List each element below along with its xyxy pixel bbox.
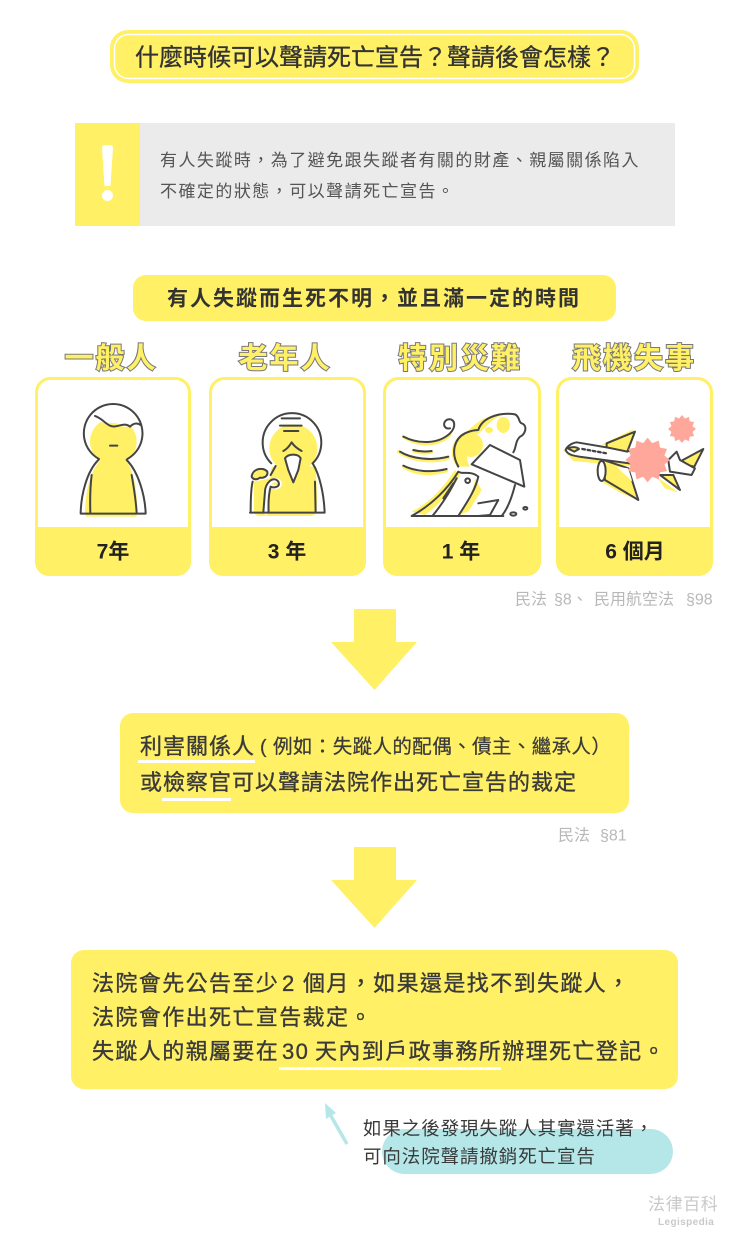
panel: special disaster [383, 342, 541, 576]
procedure text: 法院會先公告至少 [92, 971, 279, 996]
heading: condition [133, 275, 616, 321]
intro text: 有人失蹤時，為了避免跟失蹤者有關的財產、親屬關係陷入 [160, 150, 640, 170]
card frame [35, 378, 191, 576]
heading: 老年人 [238, 342, 332, 375]
underline: interested parties [138, 760, 255, 763]
procedure text: 法院會作出死亡宣告裁定。 [92, 1005, 373, 1030]
arrow: back to court [325, 1103, 347, 1144]
panel: elderly person [209, 342, 366, 576]
arrow: down 1 [331, 609, 417, 690]
heading: 一般人 [64, 342, 158, 375]
logo: Legispedia [648, 1195, 718, 1228]
icon: person [81, 404, 146, 517]
callout: revoke declaration [363, 1118, 673, 1174]
court order text: 或檢察官可以聲請法院作出死亡宣告的裁定 [140, 770, 577, 795]
title [110, 30, 639, 83]
panel: ordinary person [35, 342, 191, 576]
citation: civil code 81: 民法 [558, 826, 590, 844]
duration: 3 年 [268, 540, 306, 564]
heading: condition: 有人失蹤而生死不明，並且滿一定的時間 [167, 286, 581, 310]
title: 什麼時候可以聲請死亡宣告？聲請後會怎樣？ [135, 44, 615, 72]
underline: prosecutor [162, 798, 231, 801]
callout: revoke declaration: 如果之後發現失蹤人其實還活著， [363, 1118, 654, 1139]
card frame [383, 378, 541, 576]
citation: civil code and aviation act: 民用航空法 [594, 590, 674, 608]
heading: 特別災難 [398, 342, 522, 375]
procedure text: 2 [282, 971, 296, 996]
icon: plane with explosions [563, 415, 703, 500]
icon: elder with cane [250, 413, 325, 516]
duration: 1 年 [442, 540, 480, 564]
panel: who may apply [120, 713, 629, 813]
procedure text [92, 971, 666, 1064]
applicants text: 例如：失蹤人的配偶、債主、繼承人） [273, 736, 611, 758]
icon: storm [398, 413, 527, 516]
procedure text: 失蹤人的親屬要在 [92, 1039, 279, 1064]
procedure text: 30 [282, 1039, 309, 1064]
underline: 30 days [279, 1067, 501, 1070]
logo: Legispedia: Legispedia [658, 1217, 714, 1228]
applicants text: 利害關係人 [140, 734, 255, 759]
procedure text: 天內到戶政事務所辦理死亡登記。 [315, 1039, 666, 1064]
intro text [160, 150, 640, 201]
card frame [209, 378, 366, 576]
duration: 6 個月 [605, 540, 665, 564]
logo: Legispedia: 法律百科 [648, 1195, 718, 1214]
duration: 7年 [97, 540, 129, 564]
heading: 飛機失事 [572, 342, 696, 375]
panel: court procedure [71, 950, 678, 1089]
citation: civil code and aviation act: §98 [686, 592, 713, 608]
panel: aviation accident [556, 342, 713, 576]
procedure text: 個月，如果還是找不到失蹤人， [303, 971, 631, 996]
citation: civil code and aviation act: 民法 [515, 590, 547, 608]
panel: intro note [75, 123, 675, 226]
citation: civil code and aviation act: §8、 [554, 592, 588, 608]
callout: revoke declaration: 可向法院聲請撤銷死亡宣告 [363, 1146, 596, 1167]
intro text: 不確定的狀態，可以聲請死亡宣告。 [160, 182, 455, 201]
applicants text: ( [260, 736, 267, 758]
citation: civil code 81: §81 [600, 828, 627, 844]
applicants text [140, 734, 611, 759]
card frame [556, 378, 713, 576]
arrow: down 2 [331, 847, 417, 928]
icon: exclamation mark [75, 123, 140, 226]
